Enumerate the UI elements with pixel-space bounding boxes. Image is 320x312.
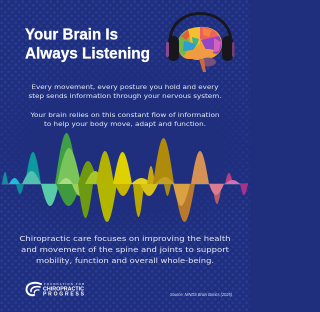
- logo: Foundation for Chiropractic Progress: PROGRESS: [43, 292, 85, 298]
- text block: intro: to help your body move, adapt and function.: [44, 120, 206, 128]
- text block: chiropractic care: [20, 234, 231, 265]
- text block: intro: Every movement, every posture you hold and every: [32, 83, 219, 91]
- right ear cup: [222, 36, 233, 61]
- cerebellum: [200, 58, 216, 66]
- source note: Source: NINDS Brain Basics (2025): [170, 292, 233, 297]
- brain stem: [199, 59, 206, 72]
- text block: chiropractic care: Chiropractic care focuses on improving the health: [20, 234, 231, 243]
- icon: brain with headphones: [166, 14, 234, 72]
- text block: chiropractic care: and movement of the spine and joints to support: [21, 245, 229, 254]
- brain: [178, 27, 222, 72]
- pink and magenta lobes: [212, 184, 222, 204]
- text block: chiropractic care: mobility, function and overall whole-being.: [36, 256, 214, 265]
- text block: intro: Your brain relies on this constant flow of information: [29, 111, 219, 119]
- logo: Foundation for Chiropractic Progress: [26, 282, 85, 298]
- headband: [170, 14, 231, 42]
- teal lobes: [2, 172, 8, 184]
- temporal lobe: [189, 49, 214, 60]
- yellow-olive lobes: [85, 171, 105, 184]
- text block: intro: step sends information through your nervous system.: [28, 92, 222, 100]
- logo: Foundation for Chiropractic Progress: FOUNDATION FOR: [44, 282, 84, 286]
- left ear cup: [168, 36, 179, 61]
- green lobes: [55, 133, 78, 184]
- text block: intro: [28, 83, 222, 128]
- baseline: [2, 183, 248, 185]
- chart: rainbow sound wave: [2, 133, 248, 222]
- title: Always Listening: [25, 46, 150, 62]
- icon: eagle swoosh: [26, 283, 41, 295]
- logo: Foundation for Chiropractic Progress: CHIROPRACTIC: [43, 286, 84, 292]
- title: Your Brain Is: [25, 26, 118, 44]
- title: [25, 26, 150, 62]
- gold and orange lobes: [153, 138, 174, 184]
